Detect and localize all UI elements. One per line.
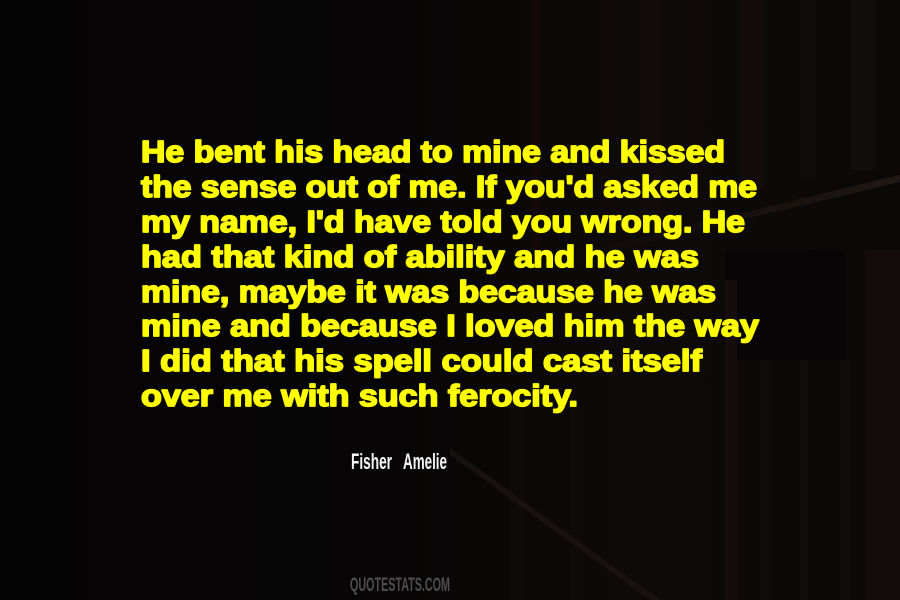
quote text: my name, I'd have told you wrong. He [141,204,745,239]
watermark: QUOTESTATS.COM [350,575,450,596]
author name: Fisher [351,449,392,474]
author name [351,449,447,474]
quote text: had that kind of ability and he was [141,239,699,274]
quote text: I did that his spell could cast itself [141,343,703,378]
quote text: mine and because I loved him the way [141,308,760,343]
author name: Amelie [403,449,447,474]
quote text: He bent his head to mine and kissed [141,134,725,169]
quote text: the sense out of me. If you'd asked me [141,169,757,204]
quote text: mine, maybe it was because he was [141,274,716,309]
quote text [141,134,760,413]
quote text: over me with such ferocity. [141,378,578,413]
